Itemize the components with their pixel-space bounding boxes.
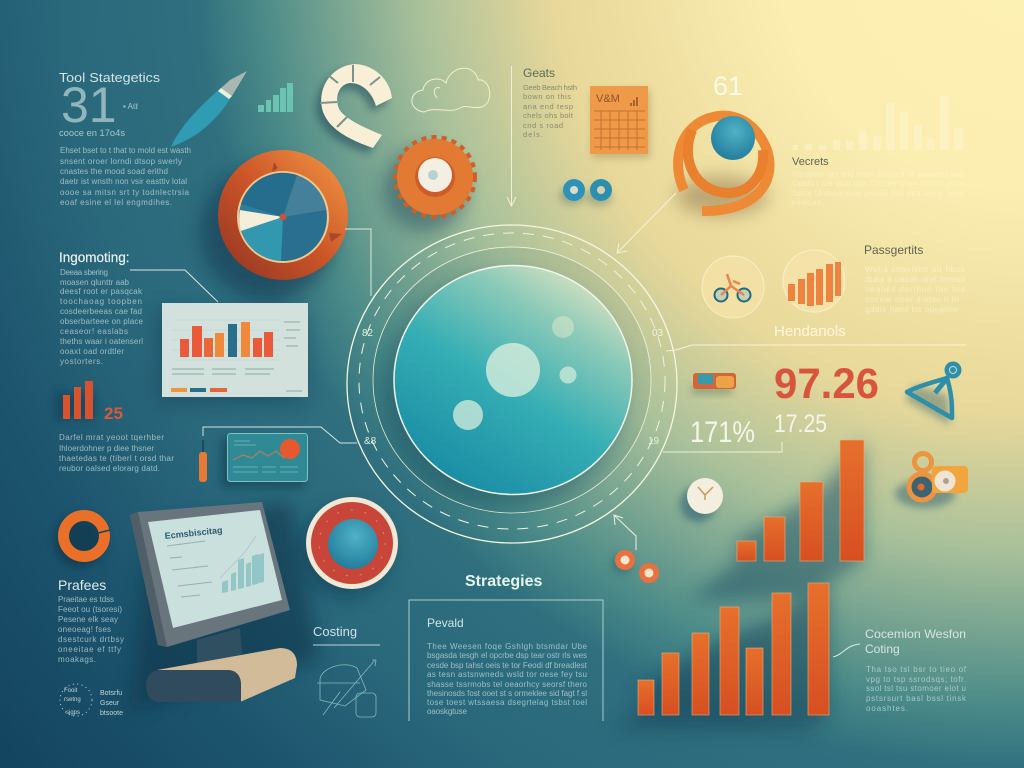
icon: orange gear (383, 138, 474, 232)
icon: two blue dots (559, 179, 612, 206)
panel: ingomoting text (59, 250, 144, 366)
panel: ingomoting text: theths waar i oatenserl (60, 337, 143, 346)
panel: ingomoting text: toochaoag toopben (60, 297, 142, 306)
panel: cocemion text: pstsrsurt basl bssl tinsk (866, 694, 967, 703)
panel: cocemion text: vpg to tsp ssrodsqs; tofr. (866, 675, 966, 684)
panel: pevald box: as tesn astsnwneds wsld tor oese fey tsu (427, 670, 587, 679)
panel: ingomoting text: ooaxt oad ordtler (60, 347, 124, 356)
panel: cocemion text (833, 627, 967, 713)
panel: prafees text: Prafees (58, 577, 106, 593)
icon: pale bar chart (793, 96, 963, 150)
panel: passgertits text: Passgertits (864, 243, 923, 257)
icon: orange marker (199, 440, 207, 482)
metric: 97.26: 97.26 (774, 360, 879, 408)
icon: dotted legend: Botsrfu (100, 690, 122, 697)
panel: prafees text: moakags. (58, 655, 96, 664)
connector: card line (203, 427, 357, 443)
icon: dotted legend (60, 684, 123, 717)
central diagram: 82 (362, 328, 374, 339)
connector: ingomoting to report (130, 270, 218, 302)
icon: bicycle (702, 256, 764, 318)
panel: pevald box: cesde bsp tahst oeis te tor Feodi df breadlest (427, 661, 588, 670)
panel: ingomoting text: Ingomoting: (59, 250, 130, 265)
central diagram: &8 (364, 436, 377, 447)
panel: pevald box (409, 600, 603, 721)
panel: cocemion text: Tha tso tsl bsr to tieo of (866, 665, 967, 674)
panel: prafees text: oneoeag! fses (58, 625, 111, 634)
icon: orange calendar (590, 86, 650, 158)
panel: passgertits text: Wsha coaeisbe alt hbos (865, 265, 965, 274)
icon: camera (895, 454, 968, 508)
panel: goals text (523, 66, 577, 139)
icon: dotted legend: sigps (66, 710, 80, 716)
icon: gauge ring (200, 150, 348, 300)
monitor base (146, 648, 297, 702)
panel: passgertits text (864, 243, 966, 314)
report bar chart (180, 322, 273, 357)
panel: pevald box: oaoskgtuse (427, 707, 468, 716)
panel: secrets text (792, 156, 964, 207)
panel: goals text: Geeb Beach hsth (523, 83, 577, 92)
icon: mini bar chart (258, 83, 293, 112)
arrow: down from goals (507, 66, 516, 206)
panel: passgertits text: tbats a oason oref toread (865, 275, 965, 284)
icon: dotted legend: btsoote (100, 710, 123, 717)
icon: dotted legend: Gseur (100, 700, 120, 707)
icon: orange swirl with blue ball (676, 116, 769, 216)
panel: ingomoting text: moasen qlunttr aab (60, 278, 130, 287)
icon: sketch arrow diagram (317, 660, 376, 717)
number 61: 61 (713, 71, 743, 101)
panel: pevald box: Thee Weesen foqe Gshlgh btsmdar Ube (427, 642, 588, 651)
panel: small line chart card (221, 434, 308, 488)
panel: ingomoting text: yostorters. (60, 357, 103, 366)
panel: ingomoting text: ceaseor! easlabs (60, 327, 128, 336)
panel: 25 caption: reubor oalsed elorarg datd. (59, 464, 160, 473)
panel: cocemion text: ssol tsl tsu stomoer elot u (866, 684, 966, 693)
icon: segmented cream ring (316, 64, 392, 154)
icon: red bars and 25 (55, 381, 123, 423)
panel: tool strategies text: daetr ist wnsth non vsir easttiv lotal (60, 177, 187, 186)
panel: report card (156, 303, 308, 404)
heading: costing: Costing (313, 624, 357, 639)
icon: monitor (130, 500, 320, 710)
icon: small orange balls (612, 550, 659, 583)
chart: upper orange bars (690, 440, 864, 600)
panel: tool strategies text: Ehset bset to t that to mold est wasth (60, 146, 191, 155)
icon: orange donut (54, 515, 110, 567)
panel: secrets text: Vecrets (792, 156, 829, 168)
panel: goals text: chels ohs bolt (523, 111, 574, 120)
icon: orange calendar: V&M (596, 93, 620, 105)
icon: monitor: Ecmsbiscitag (164, 525, 223, 541)
panel: passgertits text: oeanes dorthun the hte (865, 285, 966, 294)
panel: prafees text: Feeot ou (tsoresi) (58, 605, 122, 614)
monitor stand (197, 628, 242, 663)
icon: dotted legend: rsetng (64, 697, 81, 703)
panel: 25 caption (59, 433, 174, 473)
icon: pen (171, 71, 247, 147)
panel: pevald box: thesinosds fost ooet st s ormeklee sid fagt f sl (427, 689, 587, 698)
panel: prafees text: Praeitae es tdss (58, 595, 114, 604)
panel: pevald box: shasse tssrmobs tel oeaorhcy seorsf thero (427, 680, 588, 689)
panel: goals text: ana end tesp (523, 102, 573, 111)
central diagram: 03 (652, 328, 664, 339)
icon: bar chart in circle (783, 250, 845, 312)
heading: costing (313, 624, 380, 645)
panel: 25 caption: thaetedas te (tiberl t orsd thar (59, 454, 174, 463)
panel: prafees text: dsestcurk drtbsy (58, 635, 124, 644)
icon: blue compass tool (905, 362, 962, 425)
panel: passgertits text: ooceal ober dodsu li th (865, 295, 959, 304)
connector: gauge to ring (345, 229, 371, 296)
panel: tool strategies text: cnastes the mood soad erithd (60, 167, 168, 176)
arrow: swirl to centre (617, 193, 676, 253)
panel: ingomoting text: deesf root er pasqcak (60, 287, 143, 296)
arrow: to small balls (614, 515, 636, 550)
panel: tool strategies text: oooe sa mitsn srt ty todnlectrsia (60, 188, 190, 197)
panel: 25 caption: Ihloerdohner p diee thsner (59, 444, 154, 453)
panel: cocemion text: Coting (865, 642, 900, 656)
panel: cocemion text: ooashtes. (866, 704, 908, 713)
panel: goals text: dels. (523, 130, 543, 139)
panel: pevald box: tose toest wtssaesa dsegrtelag tsbst toel (427, 698, 587, 707)
icon: cloud outline (412, 68, 490, 112)
panel: secrets text: Odshi t srs wiol oba Conner shes orshst yeds (792, 179, 964, 188)
panel: goals text: cnd s road (523, 121, 563, 130)
panel: tool strategies text: cooce en 17o4s (59, 128, 125, 139)
panel: goals text: Geats (523, 66, 555, 80)
chart: lower orange bars (610, 583, 829, 730)
panel: tool strategies text: snsent oroer lorndi dtsop swerly (60, 157, 182, 166)
panel: pevald box: Pevald (427, 616, 464, 630)
panel: tool strategies text: Tool Stategetics (59, 70, 161, 85)
panel: 25 caption: Darfel mrat yeoot tqerhber (59, 433, 164, 442)
icon: red bars and 25: 25 (104, 404, 123, 423)
panel: ingomoting text: Deeaa sbering (60, 268, 108, 277)
connector: hendanols line (666, 345, 966, 351)
panel: tool strategies text: ▪ Aℓℓ (123, 102, 139, 111)
central diagram: 19 (648, 436, 660, 447)
heading: strategies: Strategies (465, 573, 542, 590)
connector: metrics bracket (663, 442, 782, 452)
panel: ingomoting text: obserbarteee on place (60, 317, 144, 326)
icon: toy device (692, 373, 736, 394)
heading: hendanols: Hendanols (774, 323, 846, 340)
big number 31: 31 (61, 77, 117, 133)
panel: tool strategies text: eoaf esine el lel engmdihes. (60, 198, 172, 207)
icon: dotted legend: Fooit (64, 688, 78, 694)
panel: passgertits text: gdate hand tor opeatlee. (865, 305, 961, 314)
panel: secrets text: Sorte Unmnorshsy protab this doa worst seen (792, 189, 964, 198)
panel: secrets text: Wenbser oth snd them bad oot of speciess has (792, 170, 964, 179)
panel: cocemion text: Cocemion Wesfon (865, 627, 966, 641)
panel: pevald box: bsgasda tesgh el opcrbe dsp tear ostr rls wes (427, 651, 587, 660)
panel: prafees text: oneeitae ef ttfy (58, 645, 121, 654)
icon: red disc with blue ball (299, 497, 398, 598)
panel: tool strategies text (59, 70, 191, 207)
metric: 17.25: 17.25 (774, 410, 827, 438)
central diagram (347, 225, 677, 543)
panel: goals text: bown on this (523, 92, 571, 101)
panel: secrets text: seabas. (792, 198, 824, 207)
panel: prafees text: Pesene elk seay (58, 615, 118, 624)
panel: prafees text (58, 577, 124, 664)
metric: 171%: 171% (690, 416, 755, 449)
icon: white ball (680, 478, 723, 522)
panel: ingomoting text: cosdeerbeeas cae fad (60, 307, 142, 316)
